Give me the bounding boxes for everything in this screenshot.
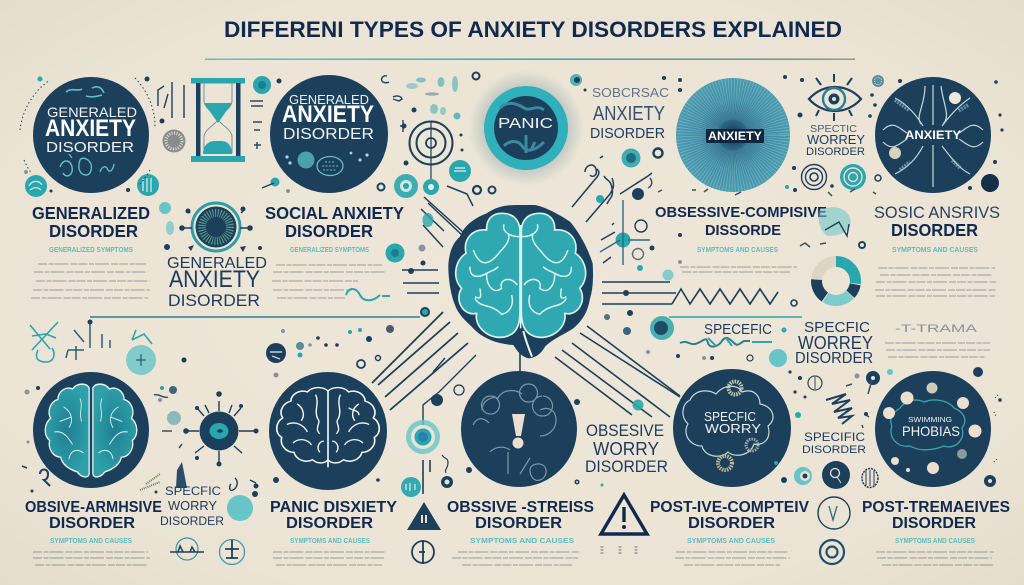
panel: generalized anxiety disorder, top second: ANXIETY: [282, 101, 374, 128]
label: post-ive-compteiv disorder: DISORDER: [688, 515, 775, 532]
panel: white outline brain: [269, 372, 387, 490]
icon: eye: [809, 74, 861, 121]
panel: anxiety radial brain lines circle: [875, 77, 1004, 193]
icons: dot cluster above panic brain: [266, 325, 394, 378]
illustration: central brain: [448, 205, 593, 358]
icons: compass marks: [170, 538, 244, 564]
icons: network nodes between brain and OCD: [572, 148, 797, 306]
text: specific disorder, small: SPECIFIC: [804, 430, 865, 444]
icons: decorative marks left of hourglass: [158, 76, 290, 193]
label: panic disxiety disorder: SYMPTOMS AND CAUSES: [290, 538, 370, 545]
label: sosic ansrivs disorder: [874, 203, 1000, 296]
icon: central node with rays: [140, 386, 279, 497]
text: generalized anxiety disorder, mid left: ANXIETY: [169, 266, 260, 293]
panel: specific worry circle: SPECFIC: [704, 409, 756, 424]
label: obssive stress disorder: OBSSIVE -STREISS: [447, 499, 594, 516]
text: sobcrsac anxiety disorder: SOBCRSAC: [592, 85, 669, 100]
text: specfic worry disorder, lower left: WORRY: [168, 498, 217, 513]
label: post-tremaeives disorder: DISORDER: [892, 515, 976, 532]
label: obsessive-compulsive disorder: SYMPTOMS AND CAUSES: [697, 247, 778, 254]
label: generalized disorder: DISORDER: [49, 221, 138, 241]
panel: anxiety radial brain lines circle: ANXIETY: [905, 128, 961, 142]
label: obsessive-compulsive disorder: OBSESSIVE-COMPISIVE: [655, 204, 827, 221]
panel: anxiety radial circle: ANXIETY: [708, 129, 762, 143]
panel: anxiety radial circle: [676, 78, 790, 192]
label: post-tremaeives disorder: [862, 499, 1010, 565]
text: obsesive worry disorder: OBSESIVE: [586, 421, 664, 440]
panel: generalized anxiety disorder, top second: GENERALED: [289, 92, 369, 107]
panel: phobias circle: PHOBIAS: [902, 423, 960, 439]
label: social anxiety disorder: [265, 203, 404, 298]
label: sosic ansrivs disorder: SYMPTOMS AND CAUSES: [892, 247, 978, 254]
label: obssive stress disorder: [447, 499, 594, 565]
label: obssive stress disorder: SYMPTOMS AND CAUSES: [470, 538, 574, 545]
label: social anxiety disorder: DISORDER: [285, 221, 373, 241]
text: spectic worrey disorder: [806, 124, 865, 158]
panel: generalized anxiety disorder, top second: DISORDER: [283, 126, 374, 143]
text: specific worrey disorder, right: [704, 319, 873, 367]
icon: target o: [820, 540, 844, 564]
panel: panic circle: [468, 70, 584, 186]
icon: target ring: [376, 385, 472, 494]
text: specific worrey disorder, right: SPECFIC: [804, 319, 870, 336]
text: obsesive worry disorder: [585, 421, 668, 476]
label: obsive-armhsive disorder: [25, 499, 162, 565]
label: obsessive-compulsive disorder: [655, 204, 827, 272]
label: obsessive-compulsive disorder: DISSORDE: [705, 222, 781, 239]
label: generalized disorder: GENERALIZED SYMPTOMS: [49, 247, 133, 254]
text: specific worrey disorder, right: DISORDER: [795, 350, 873, 367]
text: spectic worrey disorder: DISORDER: [806, 146, 865, 158]
panel: panic circle: PANIC: [498, 115, 553, 132]
icon: teal arrow and dots: [800, 207, 865, 248]
panel: specific worry circle: [673, 369, 791, 487]
text: generalized anxiety disorder, mid left: DISORDER: [168, 291, 260, 310]
text: sobcrsac anxiety disorder: DISORDER: [590, 125, 665, 142]
diagram: radiating lines from central brain: [90, 308, 802, 445]
icon: circled check: [818, 497, 850, 529]
text: post-trauma block: [885, 323, 990, 357]
text: sobcrsac anxiety disorder: ANXIETY: [593, 103, 665, 125]
icon: small warning triangle: [407, 502, 441, 530]
icon: teal badge: [401, 477, 421, 497]
label: post-ive-compteiv disorder: [650, 499, 809, 565]
icons: trio beneath specific disorder: [774, 461, 878, 489]
label: generalized disorder: [31, 203, 150, 298]
text: post-trauma block: -T-TRAMA: [895, 323, 978, 335]
icon: target clock: [412, 540, 434, 564]
panel: generalized anxiety disorder, top left: ANXIETY: [45, 115, 136, 142]
icons: middle cluster right of specific worry: [788, 369, 893, 428]
text: specific disorder, small: DISORDER: [802, 444, 866, 456]
label: panic disxiety disorder: [270, 499, 397, 565]
panel: phobias circle: [875, 367, 1002, 487]
title: DIFFERENI TYPES OF ANXIETY DISORDERS EXPLAINED: [224, 17, 842, 42]
label: obssive stress disorder: DISORDER: [475, 515, 562, 532]
text: specific worrey disorder, right: SPECEFIC: [704, 321, 772, 338]
label: post-tremaeives disorder: SYMPTOMS AND CAUSES: [895, 538, 975, 545]
label: obsive-armhsive disorder: DISORDER: [49, 515, 135, 532]
text: generalized anxiety disorder, mid left: GENERALED: [167, 255, 267, 272]
icon: large warning triangle: [601, 495, 647, 554]
text: specfic worry disorder, lower left: SPECFIC: [165, 484, 221, 498]
label: panic disxiety disorder: PANIC DISXIETY: [270, 499, 397, 516]
label: obsive-armhsive disorder: OBSIVE-ARMHSIVE: [25, 499, 162, 516]
icons: doodle cluster upper left of bottom row: [22, 320, 186, 494]
text: specfic worry disorder, lower left: [160, 484, 253, 528]
panel: generalized anxiety disorder, top left: [20, 76, 159, 197]
label: social anxiety disorder: SOCIAL ANXIETY: [265, 203, 404, 223]
panel: exclamation circle: [461, 371, 577, 487]
text: generalized anxiety disorder, mid left: [167, 255, 267, 310]
label: social anxiety disorder: GENERALIZED SYMPTOMS: [290, 247, 369, 254]
text: spectic worrey disorder: WORREY: [807, 132, 865, 147]
text: obsesive worry disorder: DISORDER: [585, 457, 668, 476]
text: specific disorder, small: [802, 430, 866, 456]
label: post-ive-compteiv disorder: SYMPTOMS AND CAUSES: [687, 538, 775, 545]
label: panic disxiety disorder: DISORDER: [286, 515, 373, 532]
icon: small circuit circle: [159, 202, 262, 252]
panel: generalized anxiety disorder, top left: GENERALED: [47, 104, 137, 120]
label: obsive-armhsive disorder: SYMPTOMS AND CAUSES: [50, 538, 132, 545]
panel: teal brain, bottom left: [33, 372, 149, 488]
text: sobcrsac anxiety disorder: [570, 74, 682, 142]
text: specfic worry disorder, lower left: DISORDER: [160, 514, 224, 528]
icon: hourglass: [191, 78, 245, 162]
label: post-ive-compteiv disorder: POST-IVE-COMPTEIV: [650, 499, 809, 516]
label: generalized disorder: GENERALIZED: [32, 203, 150, 223]
label: sosic ansrivs disorder: SOSIC ANSRIVS: [874, 203, 1000, 222]
icons: worry cluster top: [604, 310, 787, 367]
text: obsesive worry disorder: WORRY: [593, 439, 659, 459]
label: post-tremaeives disorder: POST-TREMAEIVES: [862, 499, 1010, 516]
icons: small dots around worry text: [574, 399, 604, 486]
panel: generalized anxiety disorder, top second: [270, 75, 388, 193]
panel: phobias circle: SWIMMING: [908, 417, 952, 424]
chart: donut: [808, 253, 864, 309]
icons: spirals: [783, 75, 902, 196]
panel: generalized anxiety disorder, top left: DISORDER: [46, 139, 134, 156]
text: spectic worrey disorder: SPECTIC: [810, 124, 857, 135]
label: sosic ansrivs disorder: DISORDER: [891, 220, 978, 240]
panel: specific worry circle: WORRY: [705, 421, 761, 436]
text: specific worrey disorder, right: WORREY: [798, 333, 873, 353]
icons: target and node cluster: [346, 72, 496, 300]
